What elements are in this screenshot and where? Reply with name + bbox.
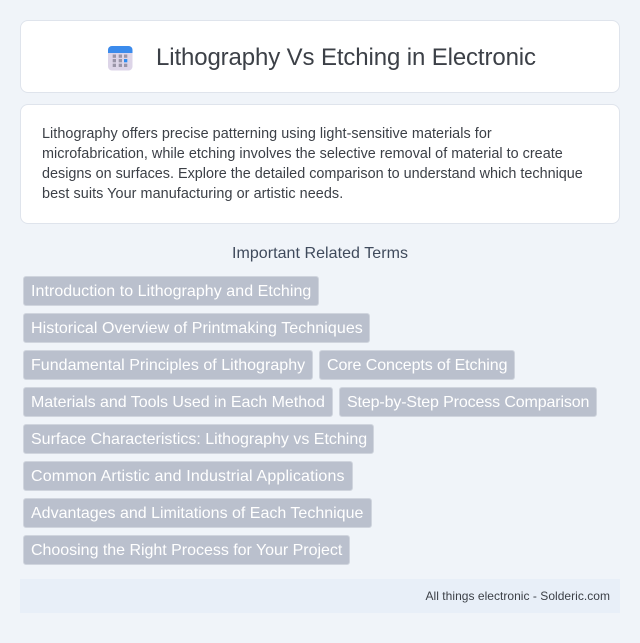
tag 10: Choosing the Right Process for Your Project [31,542,342,559]
tag 3: Fundamental Principles of Lithography [31,357,305,374]
intro text panel: designs on surfaces. Explore the detailed comparison to understand which technique [42,166,583,182]
intro text panel [20,104,620,224]
tag 8: Common Artistic and Industrial Applications [31,468,345,485]
tag 9: Advantages and Limitations of Each Technique [31,505,363,522]
tag 5 [23,387,333,417]
tag 5: Materials and Tools Used in Each Method [31,394,325,411]
footer: All things electronic - Solderic.com [426,589,610,603]
icon: calendar grid [108,46,132,70]
tag 7 [23,424,374,454]
intro text panel: best suits Your manufacturing or artistic needs. [42,186,343,202]
section heading: Important Related Terms [232,245,408,262]
tag 7: Surface Characteristics: Lithography vs Etching [31,431,367,448]
tag 3 [23,350,313,380]
tag 10 [23,535,350,565]
tag 2 [23,313,370,343]
tag 6 [339,387,597,417]
tag 8 [23,461,353,491]
tag 4 [319,350,515,380]
intro text panel: microfabrication, while etching involves the selective removal of material to create [42,146,563,162]
term tags [23,276,597,565]
heading: Lithography Vs Etching in Electronic [156,44,536,71]
tag 1: Introduction to Lithography and Etching [31,283,311,300]
tag 6: Step-by-Step Process Comparison [347,394,589,411]
tag 9 [23,498,372,528]
tag 1 [23,276,319,306]
title card [20,20,620,93]
tag 4: Core Concepts of Etching [327,357,507,374]
footer [20,579,620,613]
tag 2: Historical Overview of Printmaking Techniques [31,320,363,337]
intro text panel: Lithography offers precise patterning using light-sensitive materials for [42,126,492,142]
